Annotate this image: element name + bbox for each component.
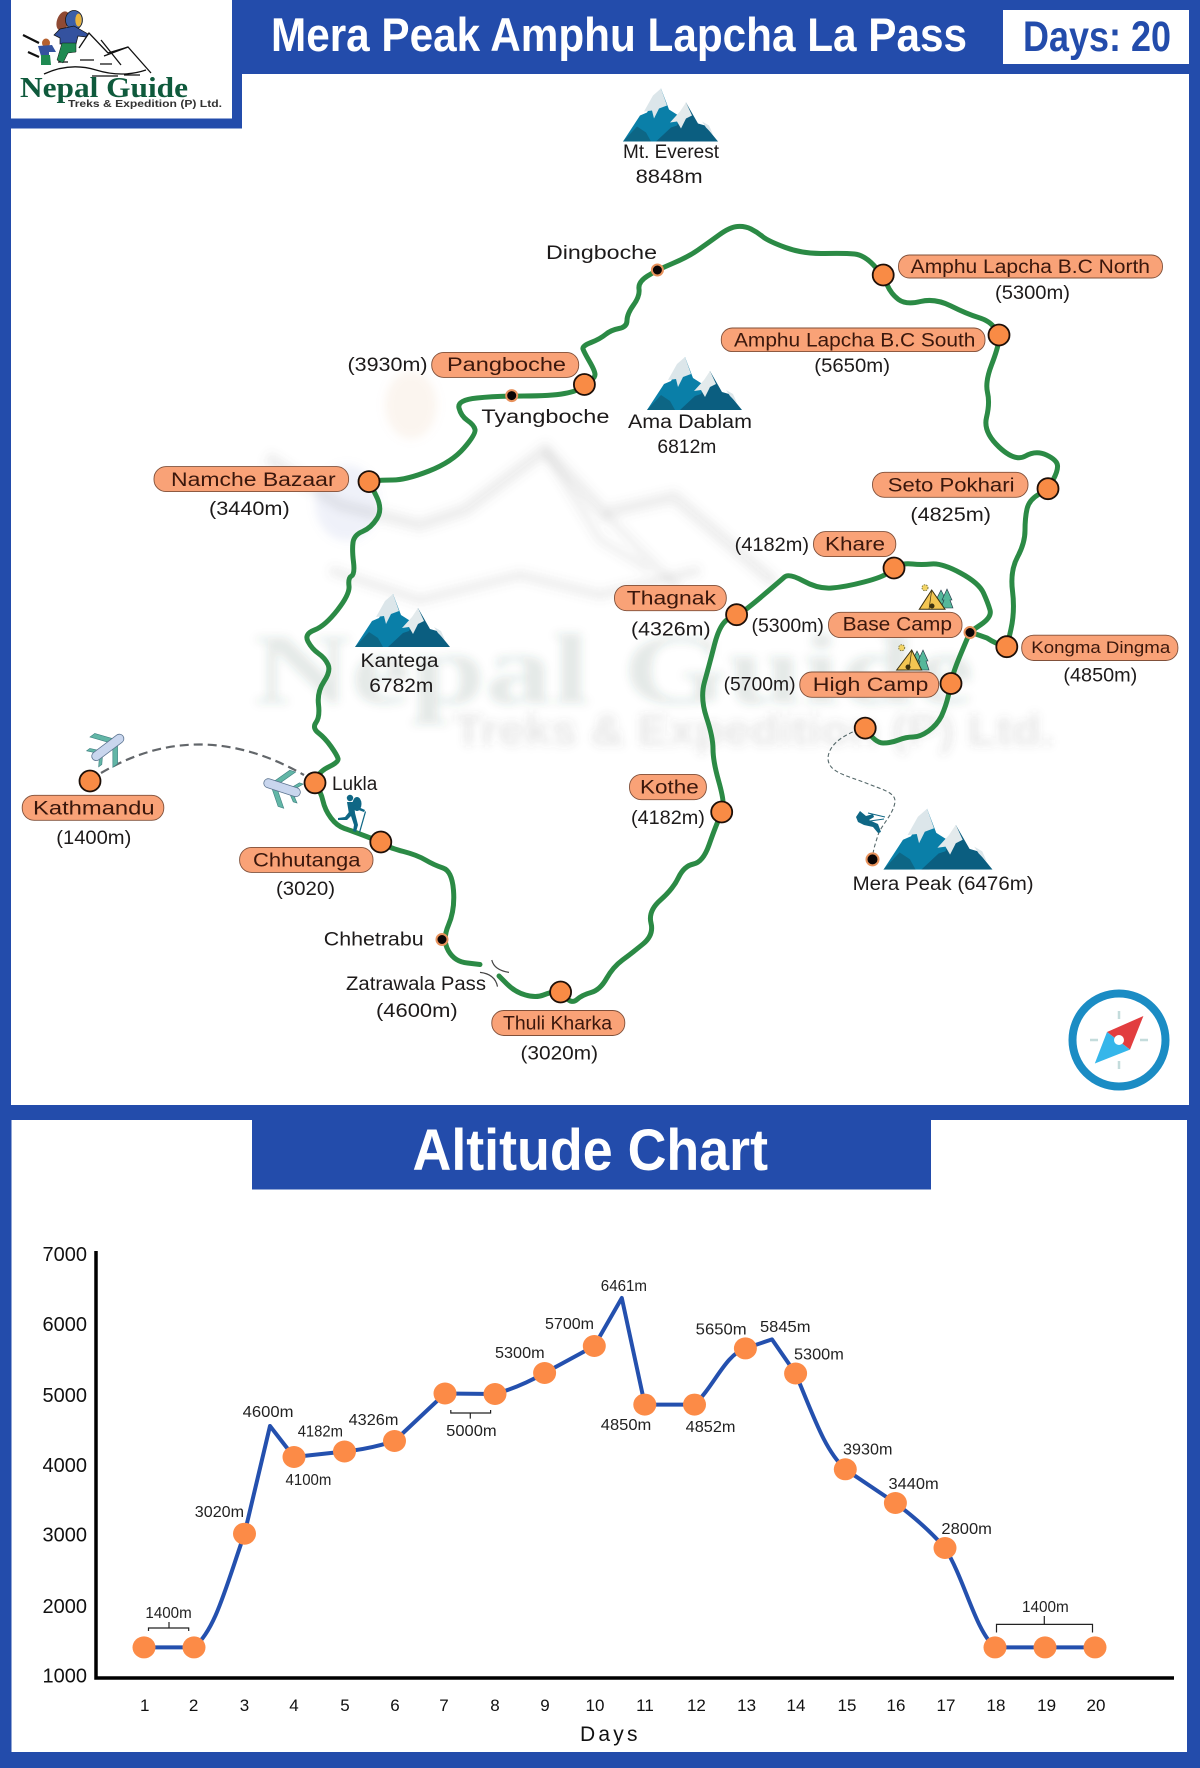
x axis day labels: 11 [636,1696,654,1715]
stop: Chhutanga: Chhutanga [253,850,361,872]
summit climb path [828,728,895,859]
label: Kantega: Kantega [360,651,439,672]
header: title banner [232,0,1200,74]
logo mountain sketch [23,33,151,76]
panel: route map [11,74,1189,1105]
stop: Kathmandu: (1400m) [56,828,131,849]
x axis day labels: 7 [439,1696,449,1715]
label: Kantega [360,651,439,697]
icon: compass [1072,994,1166,1086]
label: Mt. Everest [623,142,720,188]
altitude value labels: 4852m [686,1419,736,1436]
trekking route [307,226,1058,1001]
stop: Amphu Lapcha B.C South: Amphu Lapcha B.C South [734,330,975,352]
altitude value labels: 6461m [601,1278,647,1295]
altitude value labels: 5650m [696,1322,747,1338]
y axis labels: 2000 [42,1596,87,1618]
stop: Thagnak [614,585,747,640]
altitude value labels: 4326m [349,1412,398,1429]
stop: Amphu Lapcha B.C North [873,255,1162,304]
y axis labels: 6000 [42,1314,87,1336]
stop: Kathmandu [22,770,164,849]
watermark: faded company logo: Treks & Expedition (P) Ltd. [454,706,1054,755]
label: Mt. Everest: 8848m [636,167,703,188]
x axis day labels: 13 [737,1696,756,1715]
stop: High Camp: High Camp [813,675,928,696]
logo tagline: Treks & Expedition (P) Ltd. [68,98,222,110]
altitude value labels: 1400m [1022,1599,1069,1616]
stop: Chhutanga [240,832,391,900]
altitude value labels: 4850m [601,1417,651,1434]
stop: High Camp [724,672,962,697]
stop: Kothe [630,774,732,829]
icon: Mt. Everest mountain [623,88,718,142]
y axis labels: 3000 [42,1524,87,1546]
altitude value labels: 5000m [446,1423,497,1440]
altitude value labels: 4182m [298,1424,343,1440]
stop: Amphu Lapcha B.C North: (5300m) [995,283,1070,304]
panel: altitude chart [12,1105,1187,1752]
stop: Khare: Khare [825,534,885,556]
stop: Lukla [304,772,378,795]
altitude value labels: 4600m [243,1404,294,1421]
x axis day labels: 5 [340,1696,350,1715]
stop: Pangboche: Pangboche [447,355,566,376]
watermark: faded company logo [254,371,1054,755]
icon: plane from Kathmandu [81,721,134,774]
altitude line [144,1298,1095,1647]
label: Mera Peak: Mera Peak (6476m) [853,874,1034,895]
x axis day labels: 9 [540,1696,550,1715]
stop: Thuli Kharka [492,982,625,1064]
stop: Base Camp [752,612,976,638]
icon: Kantega mountain [355,594,450,647]
logo wordmark: Nepal Guide [20,72,188,104]
stop: Dingboche: Dingboche [546,243,657,264]
x axis day labels: 2 [189,1696,198,1715]
stop: Namche Bazaar [154,467,380,520]
stop: Kothe: (4182m) [631,808,705,829]
x axis day labels: 16 [887,1696,905,1715]
x axis day labels: 12 [687,1696,706,1715]
altitude value labels: 3020m [195,1504,244,1521]
stop: Thuli Kharka: Thuli Kharka [503,1014,612,1034]
stop: Chhetrabu: Chhetrabu [324,930,424,950]
altitude markers [132,1335,1106,1658]
flight path [101,744,304,775]
stop: Seto Pokhari: Seto Pokhari [888,476,1014,496]
node: Mera Peak summit [866,853,878,865]
x axis day labels: 6 [390,1696,400,1715]
stop: Khare [735,532,904,578]
range brackets [148,1410,1092,1632]
label: Ama Dablam [628,412,752,458]
y axis labels: 1000 [42,1666,87,1688]
x axis day labels: 14 [787,1696,805,1715]
x axis day labels: 19 [1037,1696,1056,1715]
label: Ama Dablam: 6812m [657,437,716,458]
stop: Lukla: Lukla [332,774,378,795]
stop: Namche Bazaar: (3440m) [209,499,290,520]
altitude value labels [145,1278,1069,1622]
altitude value labels: 5300m [495,1345,545,1362]
altitude value labels: 5845m [760,1319,810,1336]
stop: Zatrawala Pass [346,974,486,1022]
stop: Amphu Lapcha B.C South: (5650m) [814,356,890,377]
label: Mt. Everest: Mt. Everest [623,142,720,163]
stop: Seto Pokhari [872,472,1058,526]
node: Mera approach [855,718,876,739]
altitude value labels: 5300m [794,1346,844,1364]
icon: climber on rope [856,811,885,833]
y axis labels [42,1244,87,1688]
stop: Khare: (4182m) [735,535,809,556]
stop: Thuli Kharka: (3020m) [520,1044,598,1064]
watermark: faded company logo: Nepal Guide [254,614,974,725]
days badge: Days: 20 [1023,13,1171,61]
altitude value labels: 3930m [843,1442,892,1458]
x axis title: Days [580,1723,638,1746]
chart axes [96,1251,1174,1678]
icon: hiker [338,795,366,833]
heading: Altitude Chart [252,1105,931,1190]
stop: Tyangboche: Tyangboche [481,407,609,428]
stop: Thagnak: Thagnak [627,588,717,610]
stop: Kongma Dingma [996,635,1178,686]
stop: Pangboche: (3930m) [348,355,428,376]
stop: Pangboche [348,352,595,395]
stop: Kongma Dingma: Kongma Dingma [1031,638,1171,657]
logo hikers [38,10,88,65]
logo: Nepal Guide [0,0,242,128]
stop: Kathmandu: Kathmandu [33,798,155,820]
stop: Zatrawala Pass: Zatrawala Pass [346,974,486,995]
stop: Dingboche [546,243,663,276]
icon: plane to Lukla [258,764,306,812]
stop: Seto Pokhari: (4825m) [910,505,991,526]
x axis day labels: 15 [838,1696,856,1715]
x axis day labels: 3 [240,1696,249,1715]
x axis day labels: 17 [937,1696,955,1715]
altitude value labels: 1400m [145,1605,192,1622]
heading: Altitude Chart: Altitude Chart [412,1118,768,1183]
y axis labels: 7000 [42,1244,87,1266]
stop: Tyangboche [481,390,609,428]
x axis day labels: 20 [1087,1696,1105,1715]
x axis day labels: 10 [586,1696,604,1715]
x axis day labels: 4 [289,1696,299,1715]
stop: Amphu Lapcha B.C North: Amphu Lapcha B.C North [911,257,1150,278]
x axis day labels [140,1696,1105,1715]
stop: Base Camp: (5300m) [752,616,824,637]
stop: Kongma Dingma: (4850m) [1063,666,1137,686]
stop: Base Camp: Base Camp [843,614,952,636]
y axis labels: 4000 [42,1455,87,1477]
icon: Mera Peak mountain [883,809,993,870]
label: Ama Dablam: Ama Dablam [628,412,752,433]
stop: Namche Bazaar: Namche Bazaar [171,470,336,491]
icon: base camp tent [919,585,953,609]
stop: Zatrawala Pass: (4600m) [376,1001,458,1022]
altitude value labels: 2800m [941,1521,992,1538]
altitude value labels: 5700m [545,1316,594,1333]
x axis day labels: 8 [490,1696,500,1715]
x axis day labels: 1 [140,1696,149,1715]
label: Kantega: 6782m [369,676,433,697]
icon: Ama Dablam mountain [647,357,742,410]
x axis day labels: 18 [987,1696,1005,1715]
y axis labels: 5000 [42,1385,87,1407]
altitude value labels: 4100m [286,1472,331,1489]
icon: Zatrawala pass marker [480,960,509,987]
altitude value labels: 3440m [888,1476,939,1493]
stop: Chhutanga: (3020) [276,879,335,900]
stop: Amphu Lapcha B.C South [721,324,1010,377]
stop: Kothe: Kothe [640,778,699,798]
stop: High Camp: (5700m) [724,674,796,696]
title: Mera Peak Amphu Lapcha La Pass [271,8,967,61]
icon: high camp tent [897,645,929,670]
stop: Thagnak: (4326m) [631,620,711,640]
